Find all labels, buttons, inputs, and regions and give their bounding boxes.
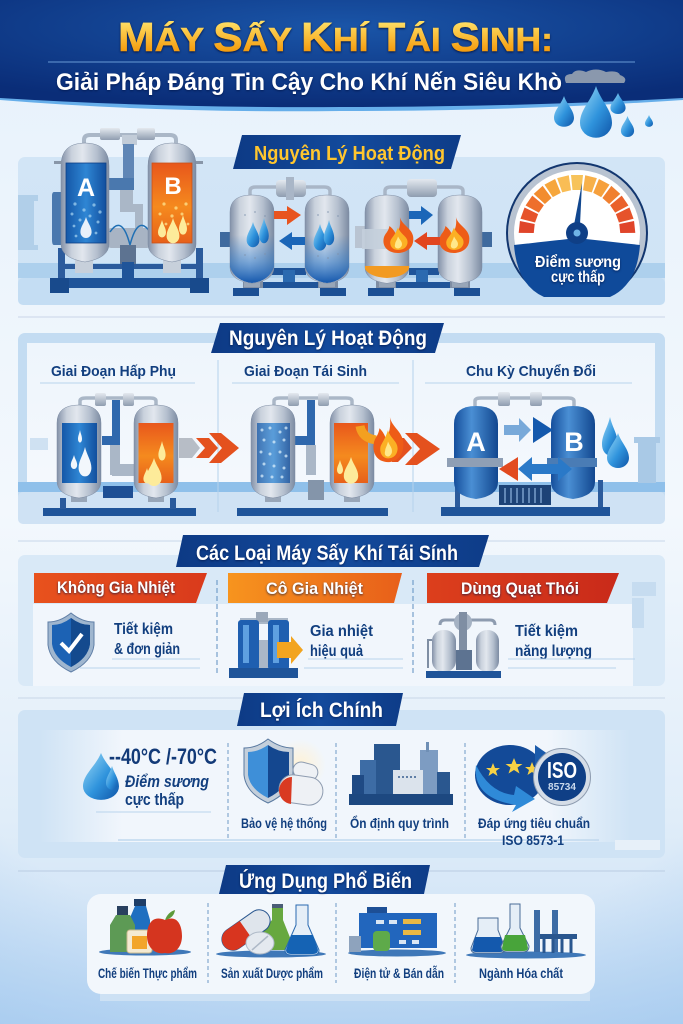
banner: Nguyên Lý Hoạt Động (gold) bbox=[233, 135, 461, 169]
benefit: system protection bbox=[241, 739, 327, 831]
panel: dryer types bbox=[18, 535, 665, 686]
banner: Nguyên Lý Hoạt Động (gold): Nguyên Lý Hoạt Động bbox=[254, 143, 445, 165]
type: Không Gia Nhiệt: Không Gia Nhiệt bbox=[57, 578, 175, 597]
stage headings: Chu Kỳ Chuyển Đổi bbox=[466, 363, 596, 380]
type: Có Gia Nhiệt bbox=[228, 573, 403, 678]
regeneration stage dryer bbox=[237, 393, 388, 516]
switching cycle dryer A B: B bbox=[564, 427, 584, 457]
type: Không Gia Nhiệt: & đơn giản bbox=[114, 641, 180, 658]
banner: Ứng Dụng Phổ Biến: Ứng Dụng Phổ Biến bbox=[239, 869, 412, 893]
icon: capsule, pill and flasks bbox=[216, 904, 326, 958]
benefit: dew point: Điểm sương bbox=[125, 773, 209, 791]
icon: bottles, jar and apple bbox=[99, 899, 191, 956]
stage headings: Giai Đoạn Hấp Phụ bbox=[51, 363, 176, 380]
benefit: dew point: --40°C /-70°C bbox=[109, 744, 217, 769]
panel: overview bbox=[18, 128, 665, 305]
banner: Ứng Dụng Phổ Biến bbox=[219, 865, 430, 894]
icon: drops at tank B bbox=[602, 417, 629, 468]
large twin-tower dryer A and B bbox=[50, 128, 209, 293]
drying tanks with drops bbox=[220, 177, 349, 296]
application: food processing: Chế biến Thực phẩm bbox=[98, 966, 197, 981]
benefit: process stability bbox=[349, 742, 453, 831]
arrows between drying tanks bbox=[274, 206, 305, 250]
icon: water drop bbox=[83, 753, 119, 800]
type: Không Gia Nhiệt: Tiết kiệm bbox=[114, 621, 173, 638]
icon: circuit board bbox=[348, 907, 446, 956]
panel: working principle bbox=[18, 323, 665, 524]
gauge: dew point bbox=[506, 162, 648, 304]
icon: ISO badge bbox=[475, 745, 590, 812]
benefit: ISO standard: Đáp ứng tiêu chuẩn bbox=[478, 815, 590, 831]
type: Dùng Quạt Thổi: Tiết kiệm bbox=[515, 623, 578, 640]
banner: Các Loại Máy Sấy Khí Tái Sinh bbox=[176, 535, 489, 567]
icon: industrial city bbox=[349, 742, 453, 805]
application: food processing bbox=[98, 899, 197, 981]
banner: Nguyên Lý Hoạt Động (white): Nguyên Lý Hoạt Động bbox=[229, 327, 427, 350]
benefit: system protection: Bảo vệ hệ thống bbox=[241, 815, 327, 831]
application: pharmaceuticals: Sản xuất Dược phẩm bbox=[221, 966, 323, 981]
icon: blower dryer bbox=[426, 612, 501, 678]
application: pharmaceuticals bbox=[216, 904, 326, 981]
type: Dùng Quạt Thổi bbox=[426, 573, 635, 678]
application: chemicals: Ngành Hóa chất bbox=[479, 966, 563, 981]
large twin-tower dryer A and B: B bbox=[164, 173, 182, 200]
application: electronics bbox=[348, 907, 446, 981]
adsorption stage dryer bbox=[43, 393, 196, 516]
benefit: dew point bbox=[83, 744, 217, 812]
gauge: dew point: Điểm sương bbox=[535, 254, 621, 271]
banner: Lợi Ích Chính bbox=[237, 693, 403, 726]
arrows between regenerating tanks bbox=[409, 206, 440, 250]
swap arrows bbox=[499, 417, 572, 481]
icon: shield with check bbox=[48, 613, 94, 672]
regenerating tanks with flames bbox=[355, 179, 492, 296]
type: Có Gia Nhiệt: Gia nhiệt bbox=[310, 623, 373, 640]
factory silhouette bbox=[634, 437, 660, 483]
large twin-tower dryer A and B: A bbox=[77, 174, 95, 202]
subtitle: Giải Pháp Đáng Tin Cậy Cho Khí Nến Siêu Khò bbox=[56, 69, 562, 96]
icon: ISO badge: ISO bbox=[547, 757, 577, 783]
type: Dùng Quạt Thổi: Dùng Quạt Thói bbox=[461, 579, 579, 598]
icon: shield and capsule bbox=[244, 739, 326, 807]
icon: flasks and refinery bbox=[466, 904, 586, 958]
benefit: ISO standard bbox=[475, 745, 590, 848]
benefit: dew point: cực thấp bbox=[125, 791, 184, 809]
type: Có Gia Nhiệt: hiệu quả bbox=[310, 643, 363, 660]
application: chemicals bbox=[466, 904, 586, 981]
switching cycle dryer A B bbox=[441, 392, 610, 516]
banner: Lợi Ích Chính: Lợi Ích Chính bbox=[260, 697, 383, 722]
benefit: process stability: Ổn định quy trình bbox=[350, 814, 449, 831]
title: MÁY SẤY KHÍ TÁI SINH: bbox=[118, 14, 553, 60]
application: electronics: Điện tử & Bán dẫn bbox=[354, 966, 444, 981]
icon: heated dryer with arrow bbox=[229, 612, 303, 678]
panel: main benefits bbox=[18, 693, 665, 858]
icon: rain cloud and water drops bbox=[554, 70, 653, 138]
stage headings bbox=[40, 360, 632, 512]
panel: common applications bbox=[87, 865, 595, 1001]
benefit: ISO standard: ISO 8573-1 bbox=[502, 832, 564, 848]
icon: ISO badge: 85734 bbox=[548, 782, 576, 793]
gauge: dew point: cực thấp bbox=[551, 269, 605, 286]
arrow: stage 1 to stage 2 bbox=[179, 433, 239, 463]
type: Dùng Quạt Thổi: năng lượng bbox=[515, 643, 592, 660]
banner: Nguyên Lý Hoạt Động (white) bbox=[211, 323, 444, 353]
stage headings: Giai Đoạn Tái Sinh bbox=[244, 363, 367, 380]
header band bbox=[0, 0, 683, 111]
type: Không Gia Nhiệt bbox=[34, 573, 207, 672]
flame and arrow: stage 2 to stage 3 bbox=[373, 417, 440, 465]
banner: Các Loại Máy Sấy Khí Tái Sinh: Các Loại Máy Sấy Khí Tái Sính bbox=[196, 542, 458, 565]
switching cycle dryer A B: A bbox=[466, 427, 486, 457]
type: Có Gia Nhiệt: Cô Gia Nhiệt bbox=[266, 579, 363, 598]
